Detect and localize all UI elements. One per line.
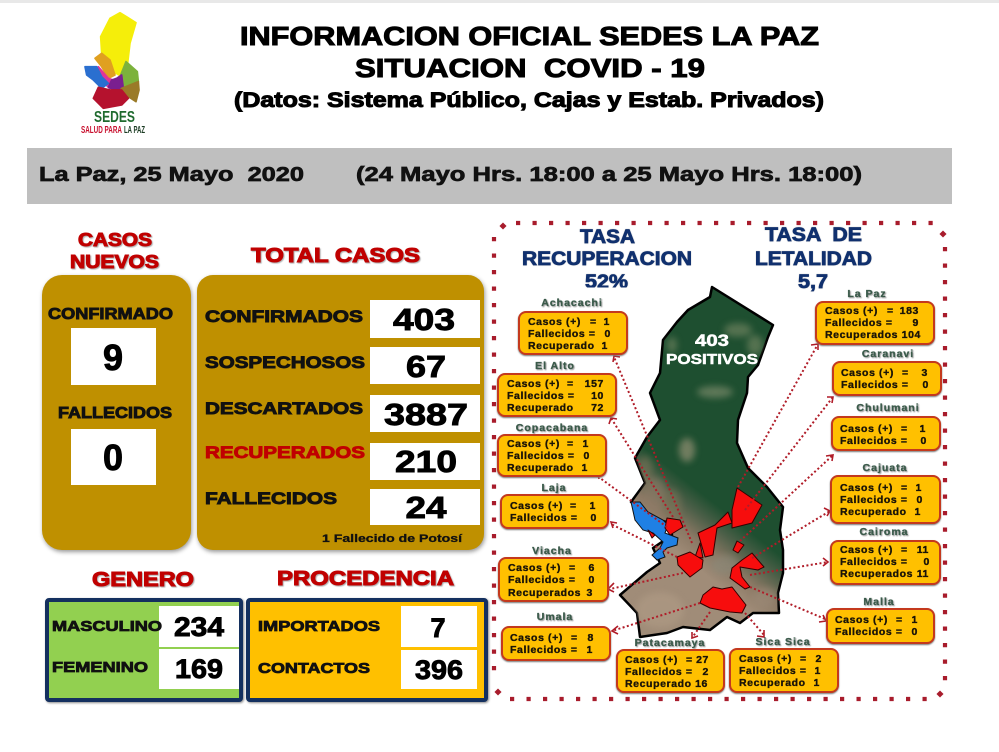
callout: Viacha	[499, 545, 608, 601]
map label: 403 positivos: POSITIVOS	[666, 351, 758, 368]
callout: Caranavi: =	[902, 367, 909, 379]
callout: Cajuata: Fallecidos =	[840, 494, 908, 506]
map: La Paz department	[620, 287, 783, 637]
callout: Copacabana	[498, 422, 606, 476]
lake Titicaca	[631, 502, 678, 560]
callout: Umala: 1	[587, 644, 593, 656]
panel: genero	[47, 600, 241, 700]
panel: casos nuevos: 0	[103, 437, 123, 478]
heading: tasa de letalidad: LETALIDAD	[755, 249, 872, 270]
panel: casos nuevos: 9	[103, 337, 123, 378]
callout: Malla: 0	[912, 626, 918, 638]
callout: Umala	[502, 611, 610, 660]
heading: tasa recuperacion: TASA	[580, 227, 635, 248]
heading: casos nuevos: CASOS	[78, 230, 152, 250]
panel: total casos: 210	[395, 444, 457, 479]
date band: La Paz, 25 Mayo 2020	[39, 163, 304, 186]
callout: El Alto: Recuperado	[507, 402, 574, 414]
callout: Cairoma: 11	[917, 544, 929, 556]
callout: Viacha: 6	[589, 562, 595, 574]
callout: Sica Sica: =	[800, 653, 807, 665]
callout: Malla: 1	[912, 614, 918, 626]
callout: Cairoma: Cairoma	[859, 526, 909, 538]
heading: tasa recuperacion	[522, 227, 692, 293]
callout: Caranavi: Caranavi	[862, 348, 914, 360]
callout: Chulumani: Casos (+)	[840, 423, 893, 435]
callout: Copacabana: 1	[582, 462, 588, 474]
logo: SEDES La Paz: SALUD PARA	[81, 124, 122, 136]
callout: Achacachi: 0	[605, 328, 611, 340]
panel: genero: MASCULINO	[52, 618, 162, 635]
callout: Patacamaya: 2	[703, 666, 709, 678]
heading: total casos: TOTAL CASOS	[251, 244, 420, 267]
callout: Cajuata: 1	[915, 506, 921, 518]
callout: La Paz: 104	[902, 329, 921, 341]
callout: Cairoma: Recuperados	[840, 568, 913, 580]
logo: SEDES La Paz: LA PAZ	[124, 124, 145, 136]
callout: El Alto	[498, 360, 616, 416]
callout: Sica Sica: 2	[816, 653, 822, 665]
panel: total casos: 3887	[384, 397, 468, 432]
panel: total casos: 403	[393, 302, 455, 337]
logo: SEDES La Paz	[81, 13, 145, 136]
callout: Cajuata	[831, 462, 940, 523]
map label: 403 positivos	[666, 332, 758, 368]
title: (Datos: Sistema Público, Cajas y Estab. Privados)	[234, 89, 824, 112]
callout: Malla: Fallecidos =	[835, 626, 903, 638]
callout: Patacamaya: Fallecidos =	[625, 666, 693, 678]
callout: Laja: 1	[590, 500, 596, 512]
callout: Malla: Casos (+)	[835, 614, 888, 626]
panel: genero: 234	[174, 612, 224, 642]
callout: Laja: =	[570, 500, 577, 512]
callout: Viacha: =	[569, 562, 576, 574]
callout: El Alto: 157	[585, 378, 604, 390]
callout: Caranavi: 3	[922, 367, 928, 379]
callout: Viacha: 0	[589, 574, 595, 586]
callout: Cairoma: Casos (+)	[840, 544, 893, 556]
callout: Cairoma	[831, 526, 940, 584]
callout: Sica Sica: Sica Sica	[755, 636, 811, 648]
heading: casos nuevos: NUEVOS	[70, 252, 159, 272]
callout: Copacabana: Recuperado	[507, 462, 574, 474]
callout: Copacabana: Casos (+)	[507, 438, 560, 450]
callout: Sica Sica	[730, 636, 838, 692]
callout: La Paz: Casos (+)	[825, 305, 878, 317]
callout: Laja: Fallecidos =	[510, 512, 578, 524]
callout: Chulumani	[832, 402, 940, 450]
callout: Caranavi: Fallecidos =	[841, 379, 909, 391]
callout: Caranavi	[833, 348, 941, 395]
callout: El Alto: Fallecidos =	[507, 390, 575, 402]
callout: Patacamaya	[617, 637, 724, 692]
callout: La Paz: 183	[900, 305, 919, 317]
callout: El Alto: 72	[591, 402, 604, 414]
callout: Chulumani: Fallecidos =	[840, 435, 908, 447]
panel: total casos: CONFIRMADOS	[205, 307, 363, 326]
heading: tasa recuperacion: 52%	[585, 272, 628, 293]
callout: Cairoma: 11	[917, 568, 929, 580]
callout: Chulumani: =	[901, 423, 908, 435]
callout: El Alto: Casos (+)	[507, 378, 560, 390]
callout: Viacha: 3	[587, 587, 593, 599]
callout: Cajuata: 0	[917, 494, 923, 506]
panel: genero: FEMENINO	[52, 659, 148, 676]
callout: Chulumani: 0	[921, 435, 927, 447]
callout: La Paz: 9	[913, 317, 919, 329]
callout: Cajuata: Cajuata	[863, 462, 907, 474]
title	[234, 21, 824, 112]
callout: Sica Sica: Casos (+)	[739, 653, 792, 665]
callout: Copacabana: Fallecidos =	[507, 450, 575, 462]
panel: total casos: 1 Fallecido de Potosí	[322, 533, 463, 545]
title: SITUACION COVID - 19	[355, 53, 705, 83]
panel: procedencia	[248, 600, 486, 700]
date band: (24 Mayo Hrs. 18:00 a 25 Mayo Hrs. 18:00)	[356, 163, 862, 186]
callout: Cajuata: Casos (+)	[840, 482, 893, 494]
callout: Achacachi: Recuperado	[528, 340, 595, 352]
callout: La Paz: Recuperados	[825, 329, 898, 341]
callout: Sica Sica: 1	[814, 677, 820, 689]
panel: casos nuevos	[42, 275, 191, 550]
heading: tasa recuperacion: RECUPERACION	[522, 249, 692, 270]
panel: casos nuevos: CONFIRMADO	[48, 306, 173, 323]
callout: Sica Sica: Fallecidos =	[739, 665, 807, 677]
heading: genero: GENERO	[92, 568, 194, 591]
panel: procedencia: IMPORTADOS	[258, 618, 380, 635]
callout: El Alto: =	[567, 378, 574, 390]
callout: Laja	[501, 482, 608, 528]
panel: procedencia: 7	[430, 613, 446, 643]
callout: Viacha: Fallecidos =	[508, 574, 576, 586]
callout: Laja: Casos (+)	[510, 500, 563, 512]
callout: Cajuata: =	[901, 482, 908, 494]
callout: Cairoma: 0	[924, 556, 930, 568]
red municipalities with cases	[648, 488, 764, 613]
panel: total casos: DESCARTADOS	[205, 399, 363, 418]
callout: Viacha: Casos (+)	[508, 562, 561, 574]
panel: total casos: FALLECIDOS	[205, 489, 337, 508]
callout: Patacamaya: Patacamaya	[635, 637, 705, 649]
callout: La Paz	[816, 288, 934, 344]
panel: genero: 169	[175, 654, 223, 684]
callout: Viacha: Viacha	[532, 545, 572, 557]
callout: Chulumani: 1	[920, 423, 926, 435]
callout: Sica Sica: 1	[815, 665, 821, 677]
date band	[27, 148, 952, 204]
callout: La Paz: =	[887, 305, 894, 317]
panel: casos nuevos: FALLECIDOS	[58, 405, 172, 422]
heading: tasa de letalidad: TASA DE	[765, 225, 862, 246]
title: INFORMACION OFICIAL SEDES LA PAZ	[240, 21, 819, 51]
callout: Malla: Malla	[863, 596, 895, 608]
heading: tasa de letalidad	[755, 225, 872, 293]
callout: Patacamaya: 16	[695, 678, 708, 690]
panel: total casos	[197, 275, 484, 550]
callout: Copacabana: 1	[583, 438, 589, 450]
callout: Copacabana: 0	[584, 450, 590, 462]
panel: total casos: 24	[406, 490, 447, 525]
panel: dotted map frame	[494, 222, 947, 699]
callout: Patacamaya: Casos (+)	[625, 654, 678, 666]
callout: Chulumani: Chulumani	[856, 402, 920, 414]
panel: total casos: RECUPERADOS	[205, 443, 365, 462]
callout: Cairoma: Fallecidos =	[840, 556, 908, 568]
callout: Copacabana: =	[567, 438, 574, 450]
callout: El Alto: El Alto	[535, 360, 575, 372]
callout: El Alto: 10	[591, 390, 604, 402]
callout: Achacachi: 1	[602, 340, 608, 352]
callout: Umala: Casos (+)	[510, 632, 563, 644]
callout: Laja: Laja	[541, 482, 567, 494]
panel: total casos: SOSPECHOSOS	[205, 353, 365, 372]
panel: procedencia: CONTACTOS	[258, 660, 370, 677]
callout: Copacabana: Copacabana	[516, 422, 588, 434]
callout: Cajuata: Recuperado	[840, 506, 907, 518]
callout: La Paz: La Paz	[847, 288, 887, 300]
callout: Caranavi: Casos (+)	[841, 367, 894, 379]
heading: casos nuevos	[70, 230, 159, 272]
callout: Viacha: Recuperados	[508, 587, 581, 599]
callout: La Paz: Fallecidos =	[825, 317, 893, 329]
logo: SEDES La Paz: SEDES	[94, 109, 135, 126]
heading: procedencia: PROCEDENCIA	[277, 567, 454, 590]
callout: Cairoma: =	[901, 544, 908, 556]
callout: Achacachi: Casos (+)	[528, 316, 581, 328]
callout: Achacachi: Fallecidos =	[528, 328, 596, 340]
callout: Achacachi: 1	[604, 316, 610, 328]
callout: Achacachi: =	[590, 316, 597, 328]
callout: Sica Sica: Recuperado	[739, 677, 806, 689]
callout: Patacamaya: 27	[696, 654, 709, 666]
map label: 403 positivos: 403	[695, 332, 729, 350]
callout: Caranavi: 0	[923, 379, 929, 391]
callout: Achacachi: Achacachi	[541, 297, 603, 309]
callout: Malla: =	[896, 614, 903, 626]
callout: Umala: =	[571, 632, 578, 644]
panel: procedencia: 396	[415, 655, 463, 685]
callout: Achacachi	[519, 297, 627, 354]
panel: total casos: 67	[406, 349, 446, 384]
callout: Patacamaya: =	[686, 654, 693, 666]
callout: Cajuata: 1	[916, 482, 922, 494]
callout: Laja: 0	[591, 512, 597, 524]
callout: Umala: 8	[588, 632, 594, 644]
arrows: map to callouts	[598, 344, 833, 638]
callout: Umala: Fallecidos =	[510, 644, 578, 656]
heading: tasa de letalidad: 5,7	[798, 272, 828, 293]
callout: Malla	[827, 596, 934, 643]
callout: Umala: Umala	[537, 611, 573, 623]
callout: Patacamaya: Recuperado	[625, 678, 692, 690]
